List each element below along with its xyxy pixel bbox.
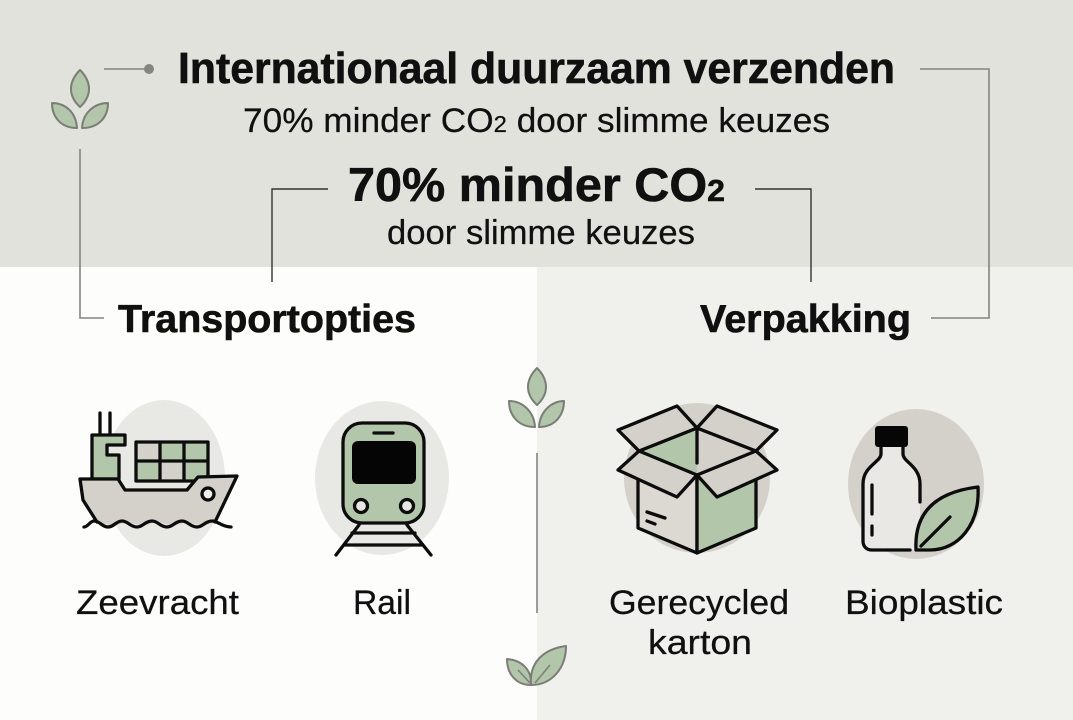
label: Gerecycled karton: Gerecycled <box>609 584 789 622</box>
heading: Verpakking: Verpakking <box>700 298 911 341</box>
label: Gerecycled karton: karton <box>648 624 752 662</box>
connector: leaves to Transportopties <box>80 149 104 318</box>
heading: Transportopties: Transportopties <box>118 298 416 341</box>
connector: hero to Transportopties <box>272 189 328 282</box>
icon: train <box>315 401 449 555</box>
icon: top-left leaves <box>52 70 108 128</box>
icon: bioplastic bottle with leaf <box>848 409 984 559</box>
icon: open cardboard box <box>618 403 777 553</box>
hero caption: door slimme keuzes <box>387 214 695 252</box>
label: Rail: Rail <box>353 584 411 622</box>
hero statistic: 70% minder CO 2 <box>348 158 725 211</box>
subtitle: 70% minder CO 2 door slimme keuzes <box>243 102 830 140</box>
icon: bottom sprout <box>507 646 566 685</box>
divider line <box>536 453 538 613</box>
label: Gerecycled karton <box>609 584 789 662</box>
title: Internationaal duurzaam verzenden <box>178 44 895 93</box>
connector: hero to Verpakking <box>755 189 811 282</box>
label: Bioplastic: Bioplastic <box>845 584 1003 622</box>
panel: packaging background <box>537 267 1073 720</box>
connector: title to Verpakking <box>920 69 989 318</box>
connector: title left with dot <box>104 64 154 74</box>
icon: container ship <box>80 400 237 556</box>
icon: centre divider leaves <box>509 368 564 427</box>
panel: transport background <box>0 267 537 720</box>
panel: header band <box>0 0 1073 267</box>
label: Zeevracht: Zeevracht <box>76 584 240 622</box>
